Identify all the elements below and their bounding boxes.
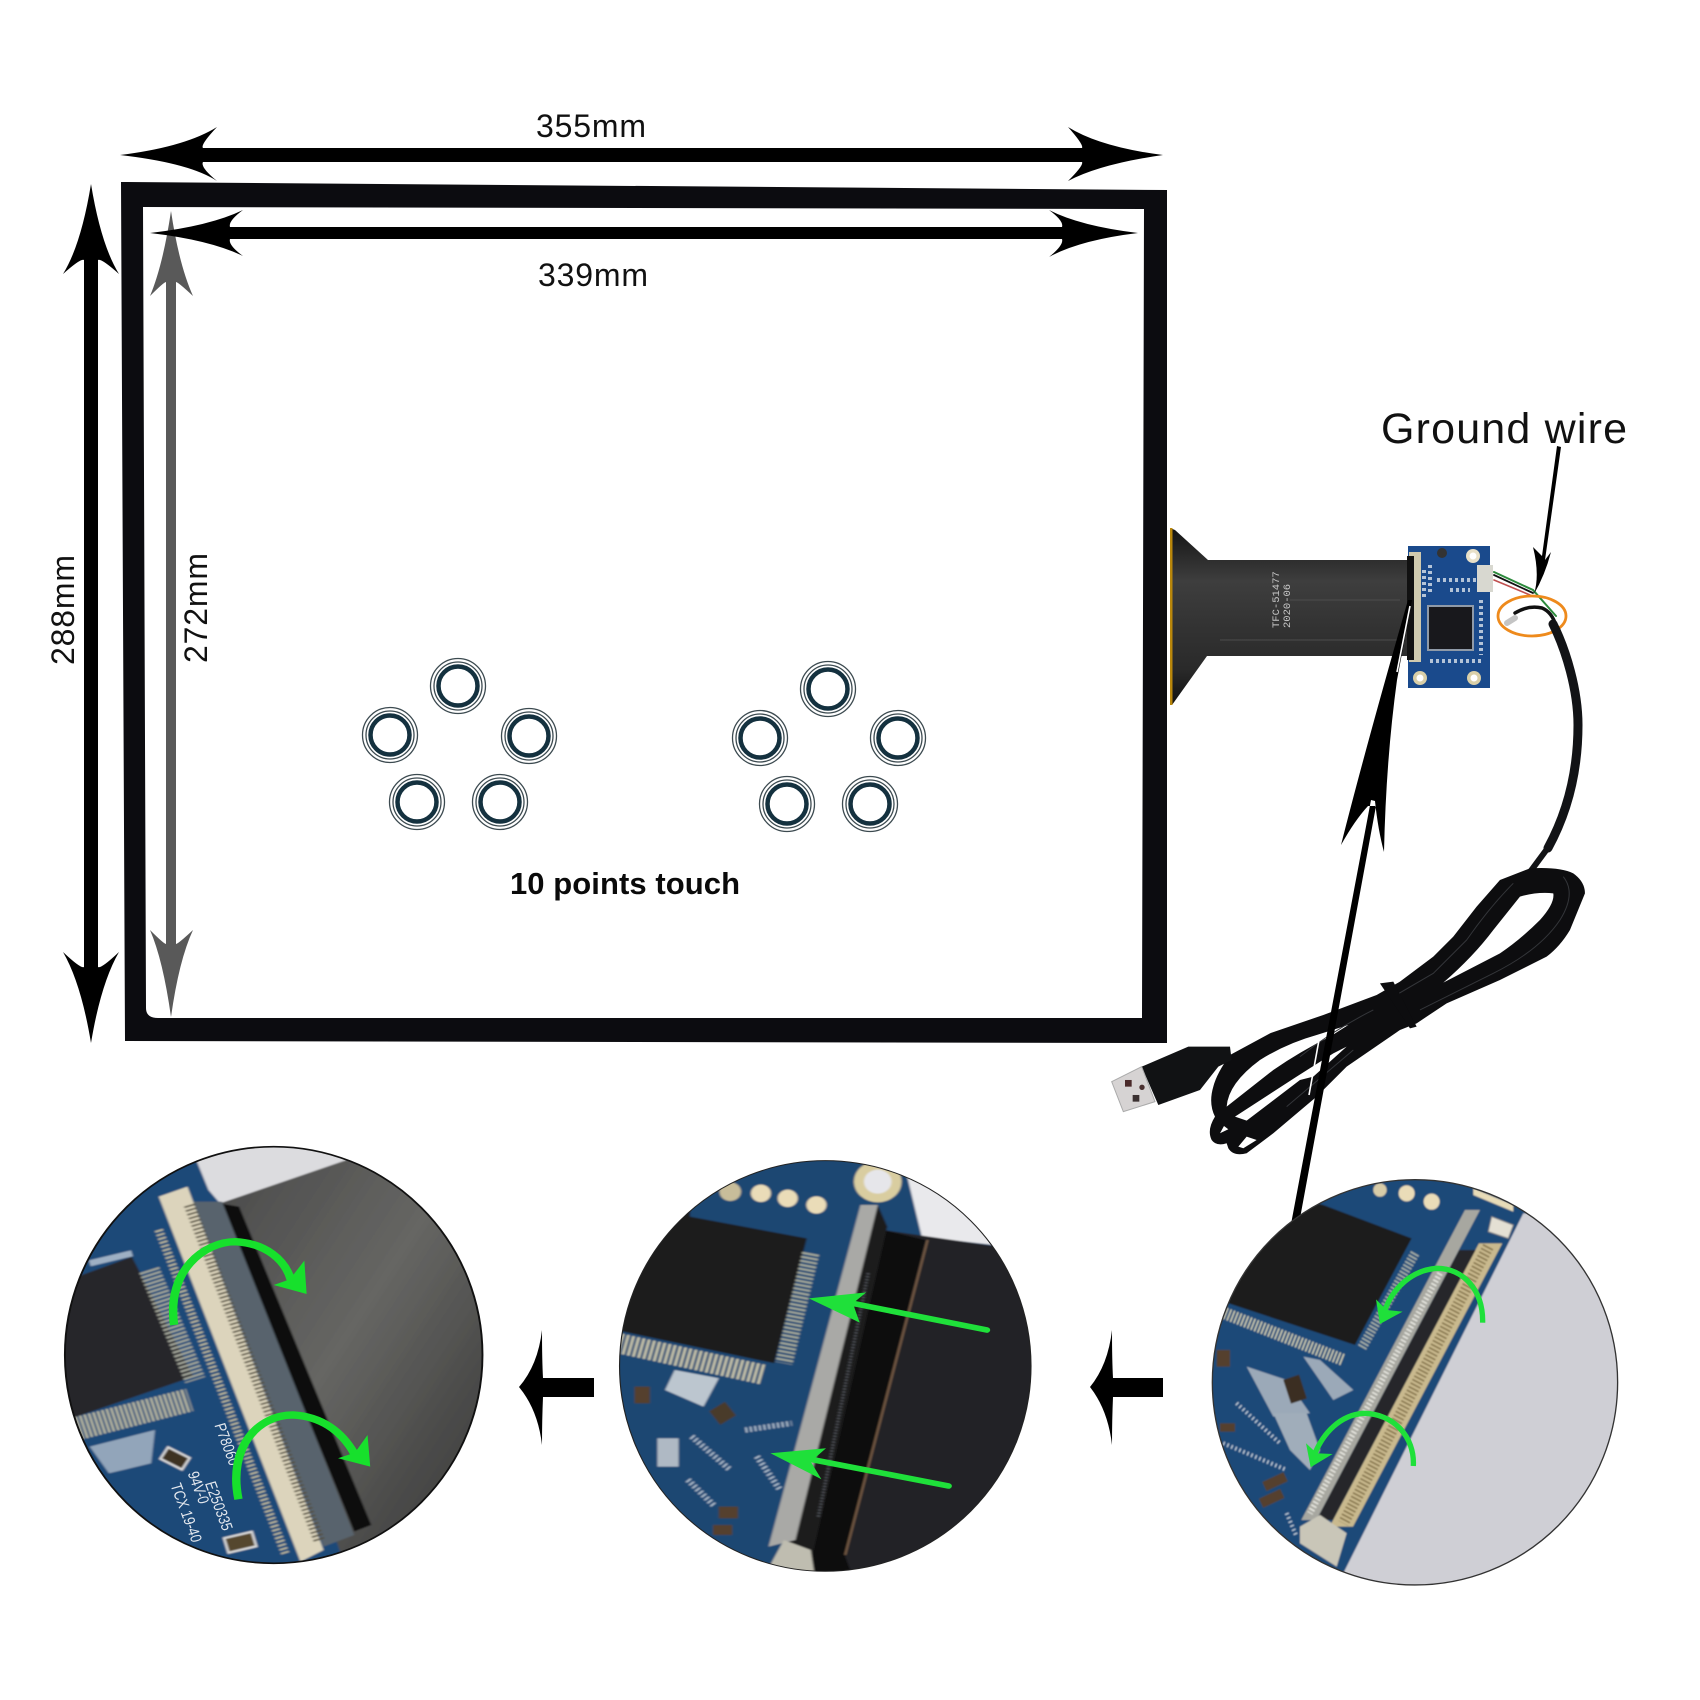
- touch panel frame: [121, 182, 1167, 1043]
- board main chip: [1428, 606, 1473, 650]
- arrow: ground wire pointer: [1533, 446, 1561, 594]
- board silkscreen text: [171, 1423, 236, 1542]
- step 3 photo: open latch: [1203, 1173, 1627, 1593]
- green arrow: upper insert: [809, 1292, 987, 1330]
- step 1 photo: close latch: [59, 1143, 488, 1570]
- arrow: 272mm height: [150, 211, 193, 1017]
- USB cable: [1210, 624, 1585, 1154]
- arrow: 288mm height: [63, 184, 119, 1043]
- USB plug: [1112, 1047, 1232, 1112]
- orange highlight around ground wire: [1498, 596, 1566, 636]
- label: 10 points touch: 10 points touch: [510, 866, 740, 901]
- label: Ground wire: Ground wire: [1381, 405, 1627, 453]
- flexible ribbon cable: [1170, 528, 1408, 705]
- board silkscreen text: P78060: [210, 1421, 242, 1468]
- USB controller board: [1407, 546, 1493, 688]
- board silkscreen text: 94V-0: [183, 1470, 212, 1506]
- label: 355mm: 355mm: [536, 108, 646, 144]
- arrow: 339mm width: [150, 210, 1138, 257]
- label: 272mm: 272mm: [178, 553, 214, 663]
- arrow: 355mm width: [120, 127, 1163, 181]
- label: 339mm: 339mm: [538, 257, 648, 293]
- green arrow: lower insert: [770, 1448, 949, 1486]
- step 2 photo: insert ribbon: [611, 1153, 1041, 1580]
- green arrow: bottom latch: [1306, 1413, 1413, 1467]
- green arrow: top latch: [1376, 1268, 1483, 1324]
- ribbon print text: TFC-51477: [1271, 571, 1283, 628]
- green arrow: lower close: [236, 1415, 370, 1499]
- board connector: [1477, 565, 1493, 592]
- arrow: step 3 to step 2: [1090, 1330, 1163, 1445]
- board silkscreen text: TCX 19-40: [166, 1481, 205, 1544]
- arrow: step 2 to step 1: [519, 1330, 594, 1445]
- ground wire leads: [1494, 572, 1556, 626]
- flexible ribbon cable: 2020-06: [1282, 584, 1294, 628]
- touch points: right hand: [732, 662, 926, 832]
- label: 288mm: 288mm: [45, 555, 81, 665]
- green arrow: upper close: [173, 1242, 307, 1325]
- arrow: connector pointer: [1288, 600, 1412, 1240]
- touch points: left hand: [362, 658, 556, 830]
- board silkscreen text: E250335: [201, 1480, 235, 1533]
